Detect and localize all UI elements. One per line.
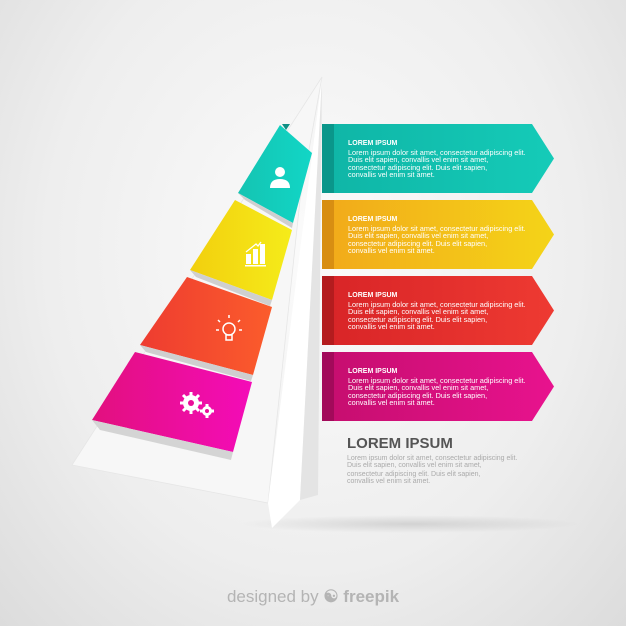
icon: chart <box>245 242 266 266</box>
white sail <box>72 77 322 528</box>
banner: yellow: consectetur adipiscing elit. Duis elit sapien, <box>348 239 487 248</box>
banner: teal: consectetur adipiscing elit. Duis elit sapien, <box>348 163 487 172</box>
bottom text block: consectetur adipiscing elit. Duis elit sapien, <box>347 471 480 478</box>
banner: red: convallis vel enim sit amet. <box>348 322 435 330</box>
banner: yellow: Duis elit sapien, convallis vel enim sit amet, <box>348 230 488 240</box>
bottom text block: Lorem ipsum dolor sit amet, consectetur adipiscing elit. <box>347 455 517 462</box>
banner: magenta: Duis elit sapien, convallis vel enim sit amet, <box>348 382 488 392</box>
banner: yellow: convallis vel enim sit amet. <box>348 246 435 254</box>
banner: yellow: Lorem ipsum dolor sit amet, consectetur adipiscing elit. <box>348 224 526 233</box>
bottom text block <box>347 435 517 484</box>
icon: bulb <box>216 315 242 340</box>
banner: red: Lorem ipsum dolor sit amet, consectetur adipiscing elit. <box>348 300 526 309</box>
step: magenta <box>92 352 252 460</box>
banner: magenta: consectetur adipiscing elit. Duis elit sapien, <box>348 391 487 400</box>
banner: yellow <box>322 200 554 269</box>
banner: teal: LOREM IPSUM <box>348 140 397 147</box>
step: teal <box>238 124 312 228</box>
banner: yellow: LOREM IPSUM <box>348 216 397 223</box>
banner: red: consectetur adipiscing elit. Duis elit sapien, <box>348 315 487 324</box>
banner: teal: Lorem ipsum dolor sit amet, consectetur adipiscing elit. <box>348 148 526 157</box>
banner: red <box>322 276 554 345</box>
banner: magenta: Lorem ipsum dolor sit amet, consectetur adipiscing elit. <box>348 376 526 385</box>
step: yellow <box>190 200 292 306</box>
icon: gears <box>180 392 214 418</box>
banner: magenta: LOREM IPSUM <box>348 368 397 375</box>
bottom text block: convallis vel enim sit amet. <box>347 478 430 484</box>
banner: red: LOREM IPSUM <box>348 292 397 299</box>
banner: teal: Duis elit sapien, convallis vel enim sit amet, <box>348 154 488 164</box>
bottom text block: Duis elit sapien, convallis vel enim sit amet, <box>347 462 482 468</box>
step: red <box>140 277 272 381</box>
footer credit: designed by ☯ freepik <box>227 587 399 606</box>
icon: person <box>270 167 290 188</box>
banner: red: Duis elit sapien, convallis vel enim sit amet, <box>348 306 488 316</box>
banner: teal: convallis vel enim sit amet. <box>348 170 435 178</box>
bottom text block: LOREM IPSUM <box>347 435 453 452</box>
banner: magenta <box>322 352 554 421</box>
banner: teal <box>322 124 554 193</box>
banner: magenta: convallis vel enim sit amet. <box>348 398 435 406</box>
